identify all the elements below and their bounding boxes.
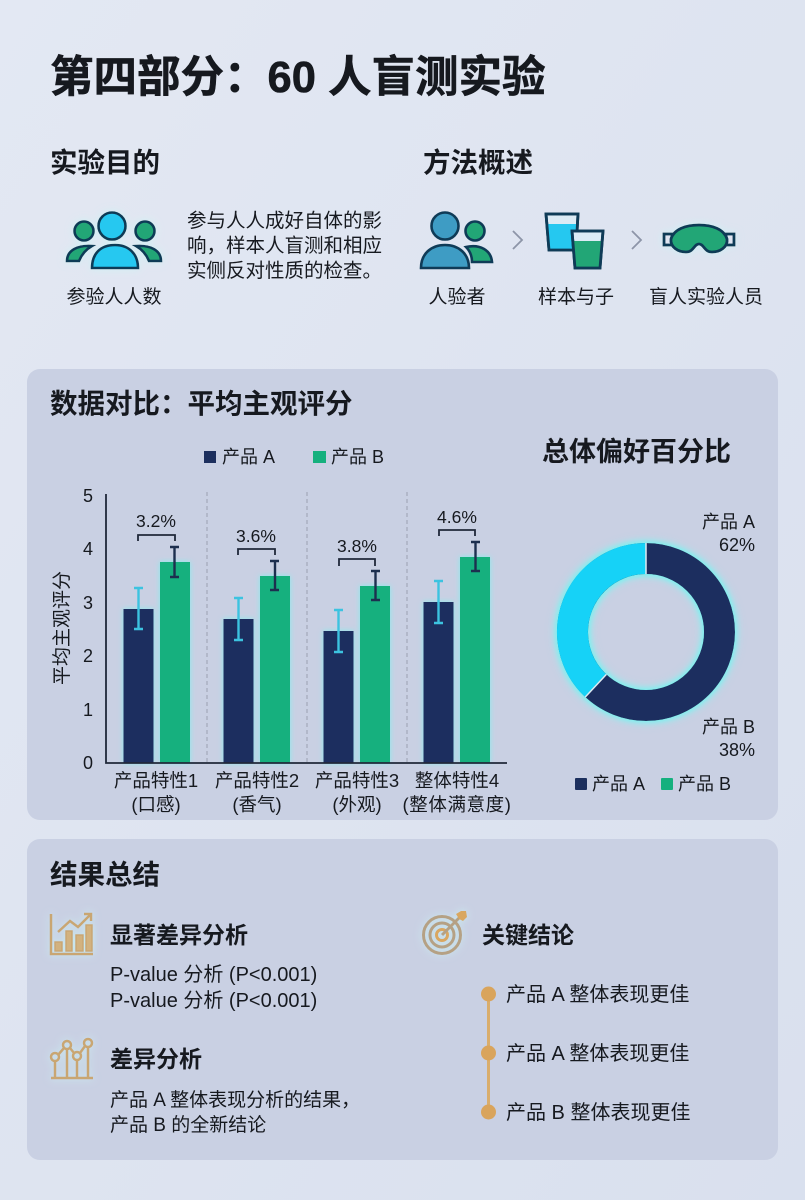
title: 第四部分：60 人盲测实验 bbox=[50, 54, 545, 102]
heading: method overview: 方法概述 bbox=[423, 147, 533, 178]
icon: line chart bbox=[51, 1039, 93, 1078]
label: testers: 人验者 bbox=[428, 286, 486, 308]
bars: feature 4: 4.6% bbox=[437, 507, 477, 527]
bars: feature 1: 3.2% bbox=[136, 511, 176, 531]
x axis labels: 整体特性4 bbox=[415, 770, 499, 791]
bar chart: mean subjective scores bbox=[51, 486, 512, 815]
text block: purpose description: 实侧反对性质的检查。 bbox=[187, 260, 382, 282]
arrow: step two to three bbox=[632, 231, 641, 249]
x axis labels: (香气) bbox=[232, 794, 282, 815]
y axis ticks: 5 bbox=[83, 486, 93, 506]
icon: participants group bbox=[67, 212, 161, 268]
legend: bar chart: 产品 A bbox=[222, 447, 275, 467]
text block: purpose description bbox=[187, 210, 382, 282]
y axis ticks bbox=[83, 486, 93, 773]
heading: key conclusions: 关键结论 bbox=[482, 922, 574, 948]
x axis labels: (口感) bbox=[131, 794, 181, 815]
donut labels: 38% bbox=[719, 740, 755, 760]
icon: bar trend bbox=[51, 914, 93, 954]
label: blind testers: 盲人实验人员 bbox=[649, 286, 763, 308]
panel: data comparison bbox=[27, 369, 778, 820]
legend: donut chart: 产品 A bbox=[592, 774, 645, 794]
text block: p-values: P-value 分析 (P<0.001) bbox=[110, 963, 317, 986]
panel: results summary bbox=[27, 839, 778, 1160]
label: samples: 样本与子 bbox=[538, 286, 614, 308]
bars: feature 2 bbox=[224, 526, 290, 763]
timeline: conclusions bbox=[481, 983, 690, 1124]
donut labels: 62% bbox=[719, 535, 755, 555]
icon: testers bbox=[421, 212, 492, 268]
donut labels: 产品 B bbox=[702, 717, 755, 737]
text block: purpose description: 参与人人成好自体的影 bbox=[187, 210, 382, 232]
text block: p-values: P-value 分析 (P<0.001) bbox=[110, 989, 317, 1012]
donut labels: 产品 A bbox=[702, 512, 755, 532]
label: participants count: 参验人人数 bbox=[66, 286, 162, 308]
heading: difference analysis: 差异分析 bbox=[110, 1046, 202, 1072]
bars: feature 4 bbox=[424, 507, 490, 763]
text block: analysis result bbox=[110, 1089, 360, 1136]
arrow: step one to two bbox=[513, 231, 522, 249]
legend: donut chart bbox=[575, 774, 731, 794]
icon: blindfold mask bbox=[664, 225, 734, 252]
x axis labels: 产品特性3 bbox=[315, 770, 399, 791]
bars: feature 3 bbox=[324, 536, 390, 763]
heading: significant difference: 显著差异分析 bbox=[110, 922, 248, 948]
heading: data comparison: 数据对比：平均主观评分 bbox=[50, 388, 352, 419]
bars: feature 3: 3.8% bbox=[337, 536, 377, 556]
donut chart: overall preference bbox=[572, 512, 755, 760]
y axis ticks: 4 bbox=[83, 539, 93, 559]
text block: p-values bbox=[110, 963, 317, 1012]
y axis title: 平均主观评分 bbox=[51, 571, 73, 685]
x axis labels: (外观) bbox=[332, 794, 382, 815]
text block: analysis result: 产品 B 的全新结论 bbox=[110, 1114, 266, 1136]
icon: sample cups bbox=[546, 214, 603, 268]
bars: feature 2: 3.6% bbox=[236, 526, 276, 546]
heading: experiment purpose: 实验目的 bbox=[50, 147, 160, 178]
x axis labels: 产品特性2 bbox=[215, 770, 299, 791]
heading: results summary: 结果总结 bbox=[50, 859, 160, 890]
bars: feature 1 bbox=[124, 511, 190, 763]
y axis ticks: 1 bbox=[83, 700, 93, 720]
y axis ticks: 2 bbox=[83, 646, 93, 666]
x axis labels bbox=[114, 770, 512, 815]
x axis labels: (整体满意度) bbox=[402, 794, 512, 815]
timeline: conclusions: 产品 B 整体表现更佳 bbox=[506, 1101, 690, 1124]
icon: target bbox=[424, 911, 467, 954]
x axis labels: 产品特性1 bbox=[114, 770, 198, 791]
text block: analysis result: 产品 A 整体表现分析的结果， bbox=[110, 1089, 360, 1111]
timeline: conclusions: 产品 A 整体表现更佳 bbox=[506, 983, 689, 1006]
text block: purpose description: 响，样本人盲测和相应 bbox=[187, 235, 382, 257]
timeline: conclusions: 产品 A 整体表现更佳 bbox=[506, 1042, 689, 1065]
donut labels bbox=[702, 512, 755, 760]
y axis ticks: 0 bbox=[83, 753, 93, 773]
heading: overall preference: 总体偏好百分比 bbox=[542, 437, 731, 467]
legend: bar chart bbox=[204, 447, 384, 467]
legend: donut chart: 产品 B bbox=[678, 774, 731, 794]
y axis ticks: 3 bbox=[83, 593, 93, 613]
legend: bar chart: 产品 B bbox=[331, 447, 384, 467]
